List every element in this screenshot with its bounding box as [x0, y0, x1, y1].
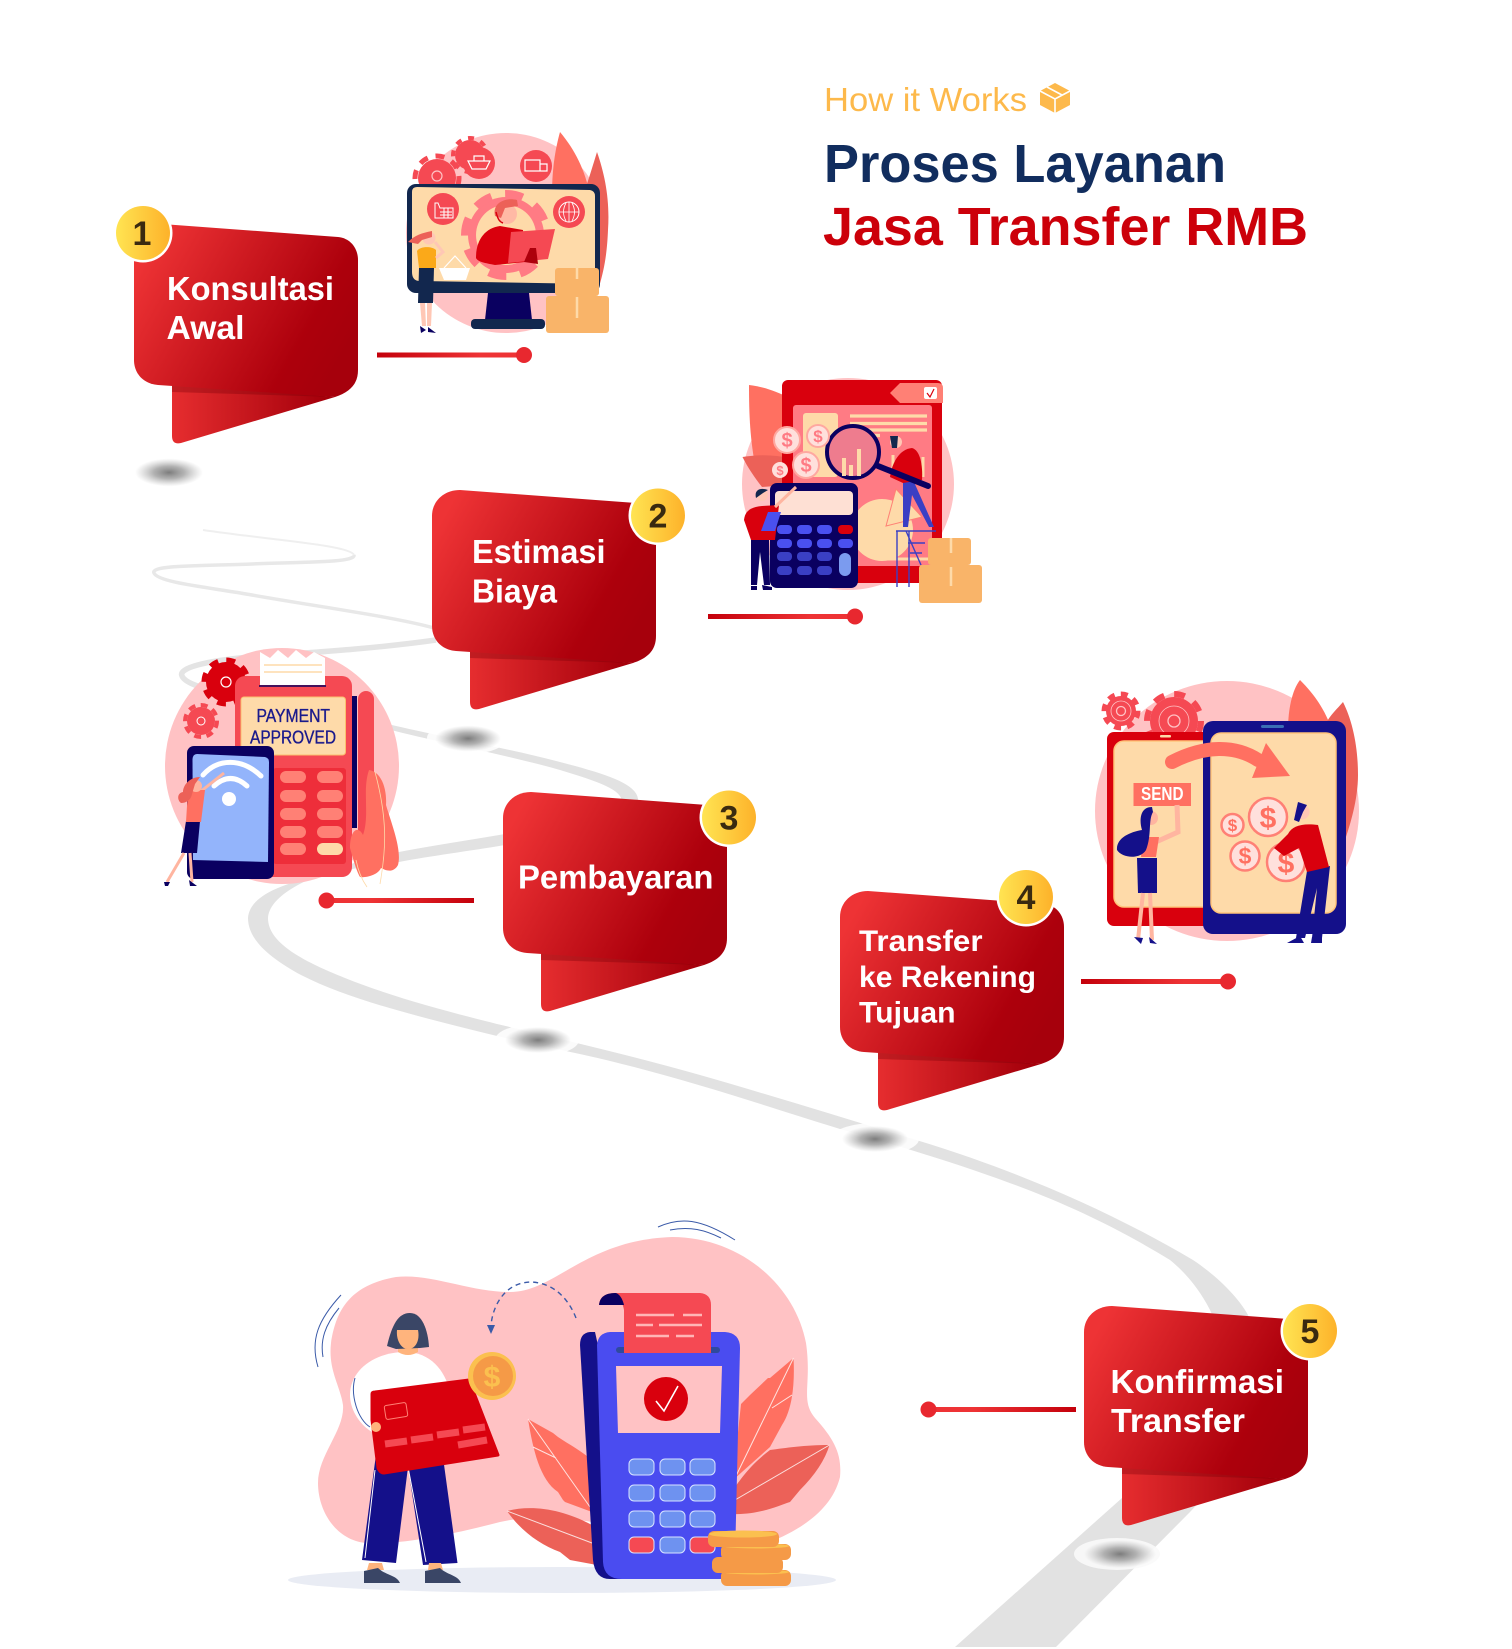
gold coin: $: [484, 1361, 501, 1394]
connector 1: [377, 347, 532, 363]
pin shadow 5: [1074, 1538, 1160, 1570]
illustration: transfer between phones: $: [1278, 847, 1295, 880]
step 4 card: Transfer ke Rekening Tujuan: 4: [1017, 879, 1036, 917]
terminal: [580, 1332, 650, 1579]
step 2 card: Estimasi Biaya: Estimasi: [472, 533, 606, 570]
illustration: payment approved terminal: APPROVED: [250, 728, 336, 748]
step 1 card: Konsultasi Awal: [114, 204, 358, 443]
ground shadow: [288, 1567, 836, 1593]
title block: [823, 81, 1308, 257]
pink blob: [318, 1237, 840, 1543]
illustration: transfer between phones: SEND: [1141, 784, 1184, 804]
motion lines: [315, 1221, 735, 1367]
heading line 2: Jasa Transfer RMB: [823, 197, 1308, 257]
step 5 card: Konfirmasi Transfer: 5: [1301, 1313, 1319, 1351]
illustration: transfer between phones: $: [1260, 802, 1277, 835]
illustration: online consultation monitor: [406, 132, 609, 333]
step 2 card: Estimasi Biaya: 2: [649, 498, 667, 536]
step 4 card: Transfer ke Rekening Tujuan: ke Rekening: [859, 961, 1036, 994]
step 5 card: Konfirmasi Transfer: [1084, 1302, 1340, 1525]
illustration: cost estimate calculator: $: [781, 430, 793, 452]
step 3 card: Pembayaran: [503, 788, 758, 1011]
terminal screen: [616, 1366, 722, 1433]
receipt: [260, 650, 325, 685]
step 4 card: Transfer ke Rekening Tujuan: Tujuan: [859, 996, 956, 1030]
icon: package box: [1040, 83, 1070, 113]
pin shadow 3: [495, 1024, 579, 1056]
receipt: [599, 1293, 711, 1353]
illustration: cost estimate calculator: $: [813, 427, 823, 446]
connector 5: [920, 1402, 1076, 1418]
pin shadow 2: [427, 722, 507, 754]
illustration: payment approved terminal: [164, 648, 399, 887]
step 1 card: Konsultasi Awal: Awal: [166, 309, 244, 346]
screen text: PAYMENT: [256, 706, 330, 726]
step 3 card: Pembayaran: 3: [720, 800, 738, 838]
illustration: cost estimate calculator: $: [800, 455, 812, 477]
step 1 card: Konsultasi Awal: Konsultasi: [167, 270, 334, 307]
pin shadow 4: [831, 1123, 919, 1155]
step 5 card: Konfirmasi Transfer: Transfer: [1111, 1402, 1245, 1439]
illustration: transfer between phones: $: [1228, 816, 1238, 835]
illustration: transfer between phones: $: [1239, 843, 1252, 869]
leaves: [528, 1419, 592, 1512]
connector 2: [708, 608, 863, 624]
illustration: cost estimate calculator: [742, 378, 982, 603]
step 4 card: Transfer ke Rekening Tujuan: [840, 868, 1064, 1110]
step 3 card: Pembayaran: Pembayaran: [518, 858, 714, 896]
arrow: [1172, 749, 1258, 762]
illustration: cost estimate calculator: $: [776, 463, 784, 478]
step 5 card: Konfirmasi Transfer: Konfirmasi: [1110, 1363, 1284, 1400]
dashed arc arrow: [487, 1282, 576, 1334]
step 1 card: Konsultasi Awal: 1: [133, 215, 151, 253]
eyebrow: How it Works: How it Works: [824, 81, 1027, 118]
connector 4: [1081, 974, 1236, 990]
keypad: [629, 1459, 715, 1553]
winding road: [154, 530, 1258, 1647]
step 4 card: Transfer ke Rekening Tujuan: Transfer: [859, 925, 983, 958]
connector 3: [318, 892, 474, 908]
illustration: woman with card and payment terminal: [288, 1221, 840, 1593]
SEND tag: [1134, 783, 1191, 806]
gold coin: [468, 1352, 516, 1400]
coin stack: [708, 1530, 791, 1586]
pin shadow 1: [135, 458, 203, 486]
illustration: transfer between phones: [1095, 680, 1359, 944]
woman: [350, 1313, 498, 1583]
step 2 card: Estimasi Biaya: Biaya: [472, 572, 558, 610]
heading line 1: Proses Layanan: [824, 134, 1226, 194]
step 2 card: Estimasi Biaya: [432, 486, 688, 709]
